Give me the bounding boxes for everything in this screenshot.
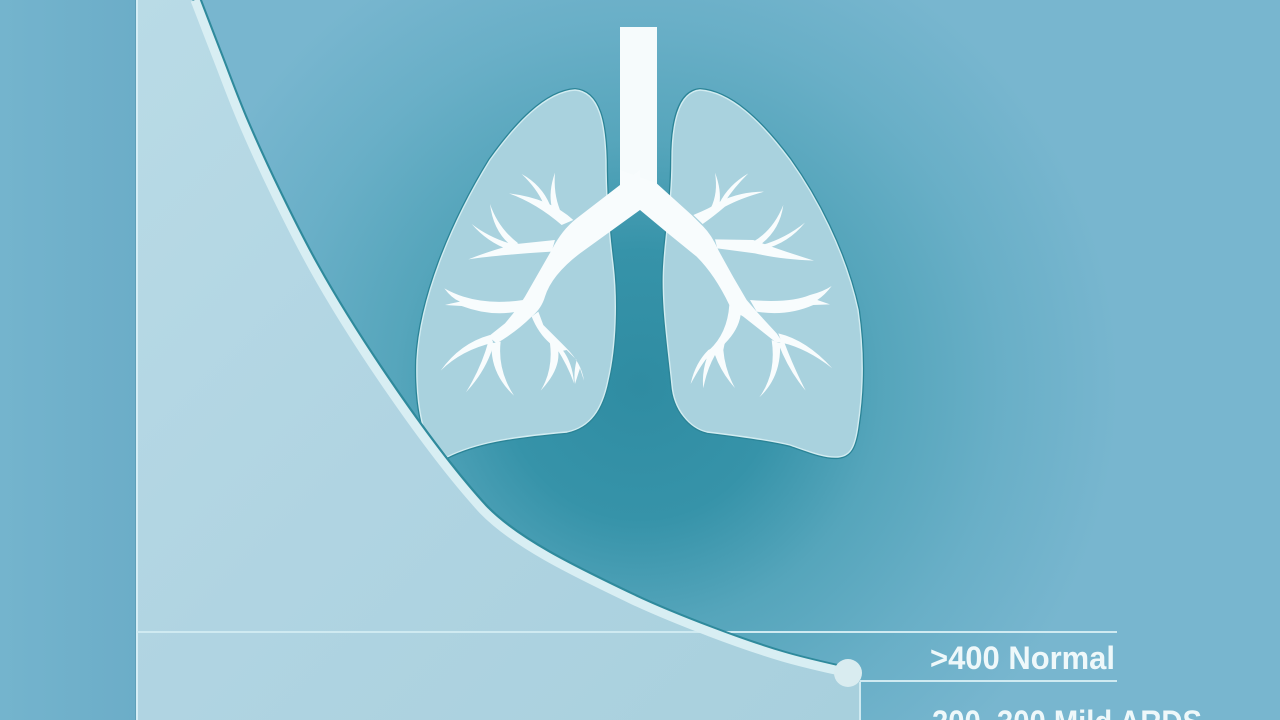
right lung (620, 90, 862, 457)
left bronchial tree (441, 170, 640, 396)
chart area under curve (137, 0, 860, 720)
label: normal: >400 Normal (930, 640, 1115, 676)
threshold line upper (137, 631, 1117, 633)
curve end point (834, 659, 862, 687)
threshold line lower (860, 680, 1117, 682)
left lung (417, 90, 640, 457)
y axis line (135, 0, 138, 720)
left axis strip (0, 0, 136, 720)
trachea (620, 27, 657, 202)
panel right edge (859, 682, 861, 720)
decay curve (195, 0, 850, 673)
right bronchial tree (620, 170, 832, 397)
lungs illustration (417, 27, 862, 457)
